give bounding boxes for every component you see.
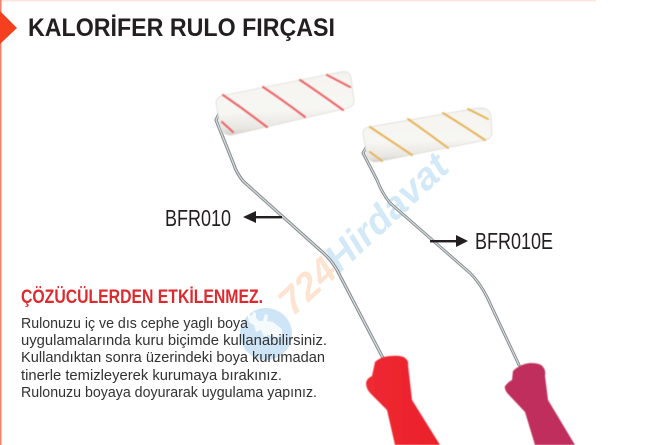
- description text: Rulonuzu iç ve dıs cephe yaglı boya: [21, 316, 249, 332]
- label: BFR010E: BFR010E: [475, 228, 553, 254]
- wire frame: [216, 112, 383, 358]
- red handle: [366, 356, 440, 445]
- title: KALORİFER RULO FIRÇASI: [28, 14, 335, 42]
- arrow: to BFR010: [243, 211, 282, 223]
- watermark: [240, 145, 458, 360]
- product: roller BFR010: [216, 72, 440, 445]
- yellow stripes: [370, 109, 488, 161]
- crimson handle: [505, 363, 575, 445]
- product: roller BFR010E: [363, 108, 575, 445]
- description text: uygulamalarında kuru biçimde kullanabilirsiniz.: [21, 333, 327, 349]
- roller sleeve: [363, 108, 492, 162]
- red stripes: [222, 75, 350, 132]
- icon: orange arrow marker: [0, 11, 17, 44]
- label: BFR010: BFR010: [165, 205, 231, 231]
- description text: tinerle temizleyerek kurumaya bırakınız.: [21, 368, 282, 384]
- watermark circle: [240, 308, 292, 360]
- watermark text: 724Hirdavat: [270, 145, 458, 324]
- heading: solvent resistance: ÇÖZÜCÜLERDEN ETKİLENMEZ.: [21, 287, 263, 308]
- arrow: to BFR010E: [430, 235, 468, 247]
- description text: Rulonuzu boyaya doyurarak uygulama yapınız.: [21, 385, 317, 401]
- wire frame: [363, 146, 519, 365]
- roller sleeve: [216, 72, 354, 135]
- watermark wrench icon: [247, 312, 282, 338]
- description text: [21, 316, 327, 401]
- description text: Kullandıktan sonra üzerindeki boya kurumadan: [21, 350, 325, 366]
